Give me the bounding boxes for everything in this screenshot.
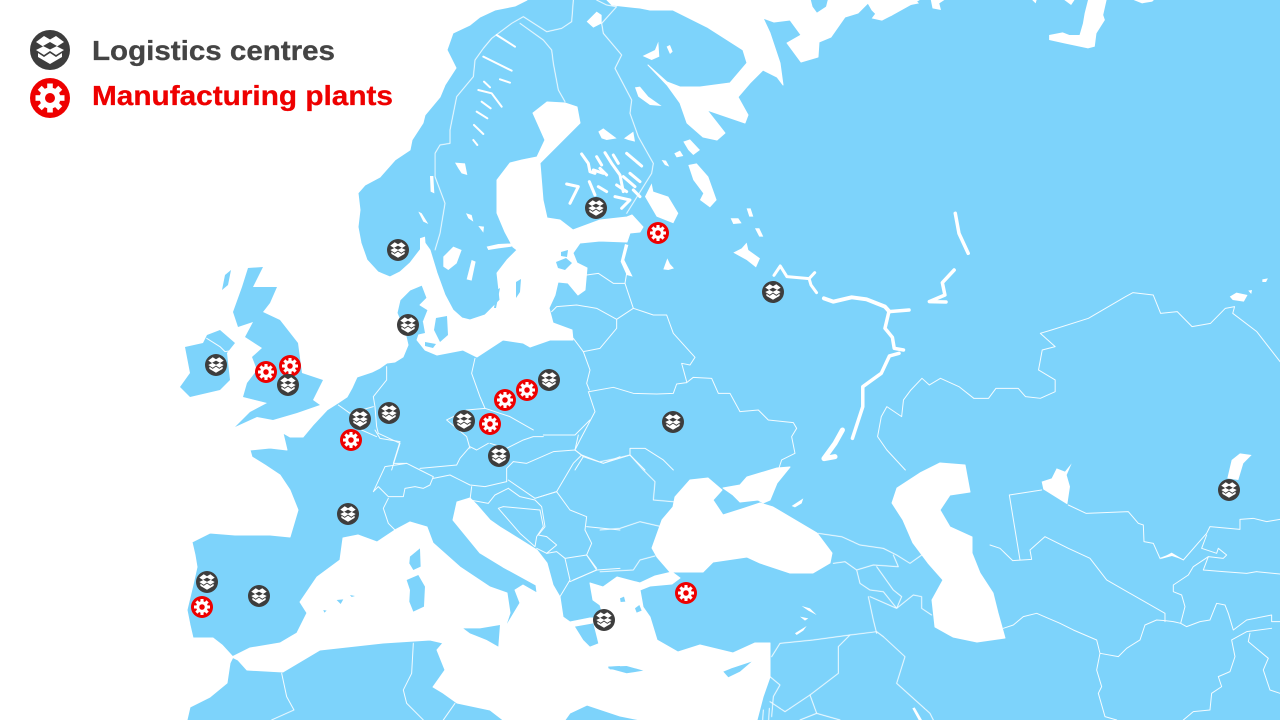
logistics marker Portugal (196, 571, 218, 593)
logistics marker Ireland (205, 354, 227, 376)
logistics marker France (337, 503, 359, 525)
legend icon: manufacturing plants gear (30, 78, 70, 118)
Arctic coast inlets (872, 0, 1154, 48)
Aral Sea (1042, 463, 1072, 504)
logistics marker Germany (378, 402, 400, 424)
Persian Gulf tip (912, 707, 922, 720)
logistics marker Czech Republic (453, 410, 475, 432)
blue islands (180, 0, 828, 677)
logistics marker Poland (538, 369, 560, 391)
borders: Black Sea, Caucasus, Middle East (600, 455, 933, 720)
Volga and Kama reservoirs (774, 213, 968, 459)
Great Britain (233, 267, 323, 427)
thin Scandinavian and Finnish lake strokes (473, 35, 642, 208)
Mediterranean islands (323, 548, 620, 669)
Ireland (180, 330, 235, 397)
logistics marker Austria (488, 445, 510, 467)
eastern Siberian islets (1230, 278, 1268, 302)
markers: manufacturing plants (191, 222, 697, 618)
lakes (418, 0, 1268, 720)
plant marker France (340, 429, 362, 451)
legend icon: logistics centres box (30, 30, 70, 70)
Black Sea (652, 478, 832, 573)
Baltic islands (494, 250, 572, 308)
Peipus and Ilmen lakes (621, 243, 760, 277)
logistics marker Greece (593, 609, 615, 631)
logistics marker Norway (387, 239, 409, 261)
Turkish lakes (792, 498, 817, 635)
borders: North Africa (272, 643, 455, 720)
borders: Russia and Kazakhstan (878, 293, 1280, 470)
logistics marker Ukraine (662, 411, 684, 433)
logistics marker Russia (762, 281, 784, 303)
Mediterranean and Aegean (232, 498, 770, 720)
legend label: logistics centres: Logistics centres (92, 35, 335, 66)
logistics marker UK (277, 374, 299, 396)
logistics marker Spain (248, 585, 270, 607)
small UK islands (222, 270, 231, 290)
borders: Western and Central Europe (207, 338, 543, 470)
plant marker Turkey (675, 582, 697, 604)
borders: Baltics, Belarus, Ukraine (552, 273, 797, 470)
legend (30, 30, 393, 118)
Lake Balkhash (1227, 453, 1252, 480)
White Sea and Barents Sea (607, 0, 919, 140)
Danish islands (414, 316, 448, 348)
logistics marker Denmark (397, 314, 419, 336)
Kolguev Island (811, 0, 828, 13)
plant marker UK west (255, 361, 277, 383)
Caspian Sea (892, 463, 1005, 642)
plant marker Portugal (191, 596, 213, 618)
borders: Central Asia (990, 490, 1280, 720)
plant marker UK (279, 355, 301, 377)
plant marker Poland east (516, 379, 538, 401)
Atlantic, North Sea and Baltic (0, 0, 643, 720)
markers: logistics centres (196, 197, 1240, 631)
Vanern and Vattern lakes (443, 243, 513, 281)
logistics marker Belgium (349, 408, 371, 430)
Crete and Cyprus (608, 597, 752, 677)
plant marker Poland (494, 389, 516, 411)
lakes in Scandinavia and Russia (418, 12, 763, 250)
plant marker Czech Republic (479, 413, 501, 435)
plant marker Russia (647, 222, 669, 244)
logistics marker Finland (585, 197, 607, 219)
legend label: manufacturing plants: Manufacturing plants (92, 80, 393, 111)
Syr Darya segment (1159, 553, 1184, 560)
borders: Nordic countries (435, 0, 653, 250)
borders: Alps and Balkans (373, 420, 620, 597)
logistics marker Kazakhstan (1218, 479, 1240, 501)
Sea of Azov (723, 467, 790, 503)
